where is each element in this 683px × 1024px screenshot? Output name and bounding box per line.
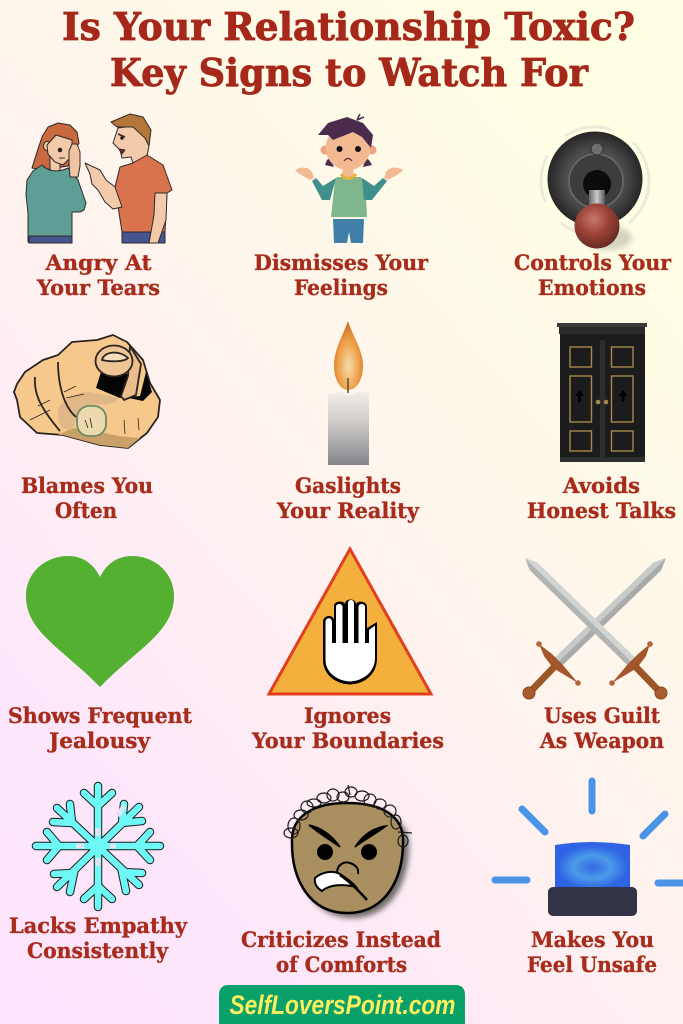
label: makes you feel unsafe: Makes You: [531, 927, 654, 952]
label: criticizes instead of comforts: Criticizes Instead: [241, 927, 441, 952]
footer brand badge: SelfLoversPoint.com: [230, 990, 456, 1020]
label: gaslights your reality: Gaslights: [295, 473, 401, 498]
icon: arguing couple: [26, 114, 172, 243]
label: dismisses your feelings: [254, 250, 429, 300]
label: ignores your boundaries: [251, 703, 444, 753]
icon: control toggle switch: [541, 127, 649, 250]
title: Is Your Relationship Toxic?: [62, 4, 635, 49]
label: lacks empathy consistently: Lacks Empathy: [9, 913, 188, 938]
label: angry at your tears: [36, 250, 160, 300]
label: lacks empathy consistently: Consistently: [27, 938, 169, 963]
icon: shrugging child: [295, 114, 403, 243]
icon: warning triangle with hand: [269, 549, 431, 694]
label: ignores your boundaries: Ignores: [304, 703, 391, 728]
label: dismisses your feelings: Feelings: [294, 275, 388, 300]
label: criticizes instead of comforts: of Comforts: [276, 952, 407, 977]
label: lacks empathy consistently: [9, 913, 188, 963]
label: blames you often: Often: [55, 498, 117, 523]
label: gaslights your reality: [276, 473, 420, 523]
label: criticizes instead of comforts: [241, 927, 441, 977]
icon: blue siren: [495, 781, 683, 916]
icon: candle: [328, 321, 369, 465]
label: ignores your boundaries: Your Boundaries: [251, 728, 444, 753]
label: controls your emotions: Controls Your: [514, 250, 672, 275]
footer brand badge: [219, 985, 465, 1024]
label: controls your emotions: Emotions: [538, 275, 646, 300]
icon: angry face: [284, 785, 412, 918]
label: makes you feel unsafe: [527, 927, 657, 977]
icon: closed black doors: [557, 323, 647, 462]
label: uses guilt as weapon: As Weapon: [539, 728, 664, 753]
label: uses guilt as weapon: [539, 703, 664, 753]
icon: snowflake: [36, 786, 160, 907]
label: avoids honest talks: Honest Talks: [527, 498, 676, 523]
label: angry at your tears: Angry At: [44, 250, 152, 275]
label: blames you often: Blames You: [21, 473, 153, 498]
icon: pointing fist: [14, 335, 160, 448]
label: angry at your tears: Your Tears: [36, 275, 160, 300]
label: uses guilt as weapon: Uses Guilt: [544, 703, 660, 728]
icon: crossed swords: [523, 558, 667, 699]
icon: green heart: [26, 556, 174, 687]
label: blames you often: [21, 473, 153, 523]
label: shows frequent jealousy: Jealousy: [47, 728, 151, 753]
label: shows frequent jealousy: Shows Frequent: [8, 703, 192, 728]
label: avoids honest talks: [527, 473, 676, 523]
label: dismisses your feelings: Dismisses Your: [254, 250, 429, 275]
label: controls your emotions: [514, 250, 672, 300]
title: Key Signs to Watch For: [110, 50, 589, 95]
title: [62, 4, 635, 95]
label: avoids honest talks: Avoids: [562, 473, 640, 498]
label: shows frequent jealousy: [8, 703, 192, 753]
label: gaslights your reality: Your Reality: [276, 498, 420, 523]
label: makes you feel unsafe: Feel Unsafe: [527, 952, 657, 977]
